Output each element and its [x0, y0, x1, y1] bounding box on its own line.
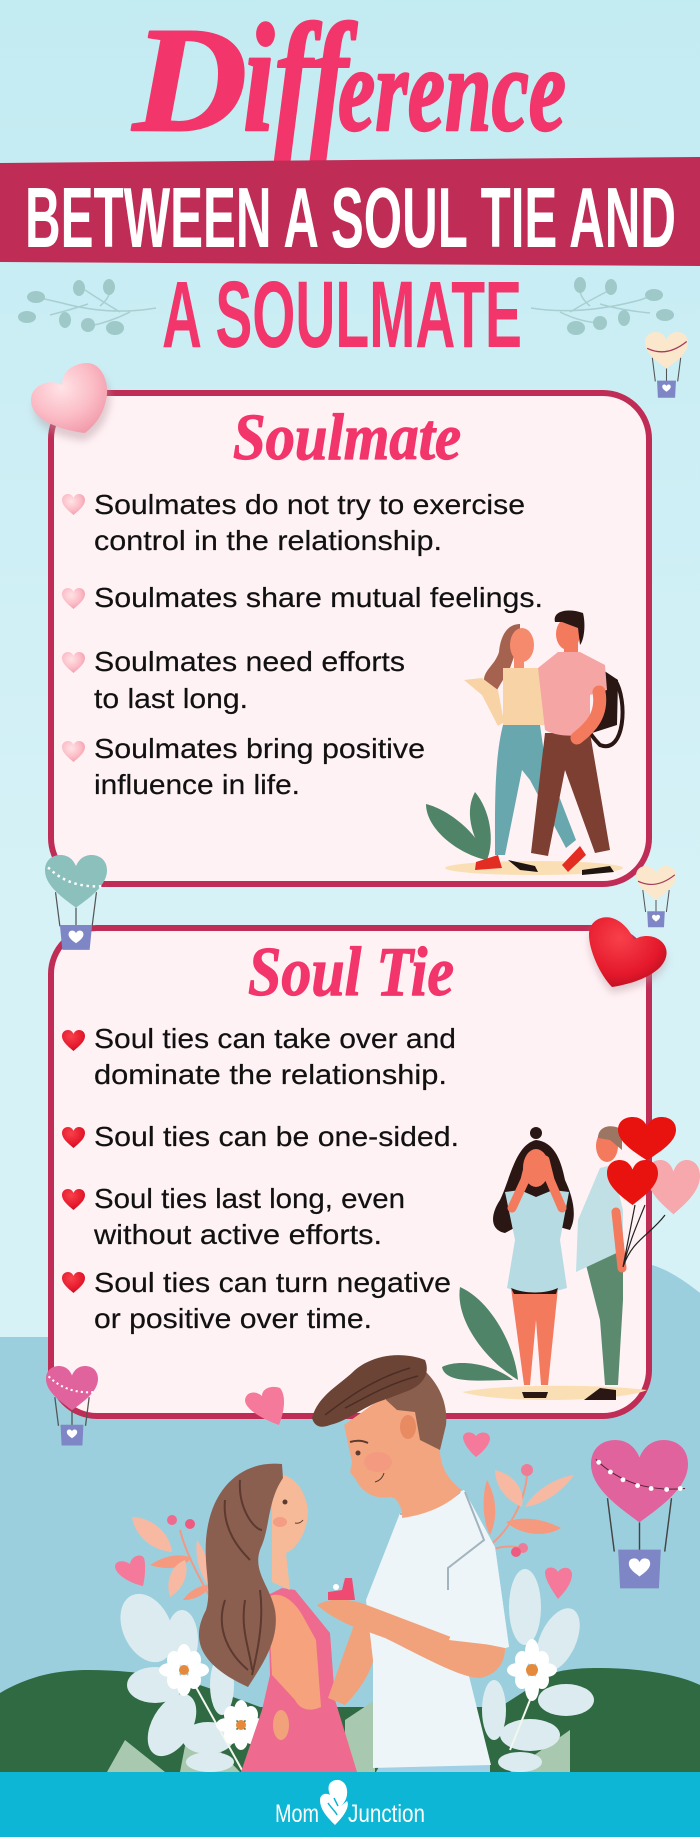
small floating heart: right of man [463, 1432, 490, 1457]
illustration: peach branch right [484, 1464, 574, 1557]
decoration: left sprig [18, 279, 156, 335]
background blue hills [0, 1265, 700, 1780]
ground: green hills [0, 1668, 700, 1772]
bullet list: soul tie: dominate the relationship. [94, 1059, 447, 1090]
bullet list: soulmate: Soulmates need efforts [94, 646, 405, 677]
balloon: pink right [591, 1440, 688, 1588]
3D pink heart [31, 363, 110, 441]
balloon: pink left [46, 1366, 98, 1446]
small floating heart: left [115, 1556, 145, 1586]
logo: mother and child mark [320, 1780, 348, 1825]
decoration: right sprig [531, 277, 674, 335]
small floating heart: right [545, 1568, 572, 1599]
heading: soul tie: Soul Tie [248, 934, 454, 1011]
illustration: proposal man [312, 1355, 509, 1772]
bullet list: soul tie: Soul ties last long, even [94, 1183, 405, 1214]
illustration: proposal woman [199, 1464, 357, 1772]
title script word: erence [338, 23, 566, 156]
balloon: cream middle right [636, 866, 676, 927]
bullet list: soulmate: Soulmates do not try to exercise [94, 489, 525, 520]
small floating heart: near panel [245, 1387, 284, 1425]
3D red heart [589, 917, 667, 993]
balloon: cream top right [645, 332, 688, 398]
logo wordmark [275, 1800, 425, 1828]
bullet list: soul tie: or positive over time. [94, 1303, 372, 1334]
illustration: walking couple [426, 610, 623, 875]
bullet list: soulmate [62, 489, 543, 800]
bullet list: soul tie: Soul ties can be one-sided. [94, 1121, 459, 1152]
bullet list: soulmate: control in the relationship. [94, 525, 442, 556]
bullet list: soulmate: Soulmates bring positive [94, 733, 425, 764]
footer band [0, 1772, 700, 1837]
balloon: teal left [45, 855, 107, 950]
bullet list: soulmate: influence in life. [94, 769, 300, 800]
bullet list: soulmate: Soulmates share mutual feelings. [94, 582, 543, 613]
bullet list: soul tie: Soul ties can turn negative [94, 1267, 451, 1298]
panel: soulmate [51, 393, 649, 884]
illustration: surprised couple with balloons [442, 1117, 700, 1400]
heading: soulmate: Soulmate [233, 401, 461, 474]
logo wordmark: Mom [275, 1800, 319, 1828]
bullet list: soul tie: Soul ties can take over and [94, 1023, 456, 1054]
title script word: D [131, 0, 247, 163]
logo wordmark: Junction [348, 1800, 425, 1828]
bullet list: soulmate: to last long. [94, 683, 248, 714]
panel: soul tie [51, 928, 700, 1416]
bullet list: soul tie [62, 1023, 459, 1334]
illustration: pale foliage and daisies [107, 1569, 594, 1772]
bullet list: soul tie: without active efforts. [93, 1219, 382, 1250]
illustration: peach branch left [132, 1515, 212, 1600]
